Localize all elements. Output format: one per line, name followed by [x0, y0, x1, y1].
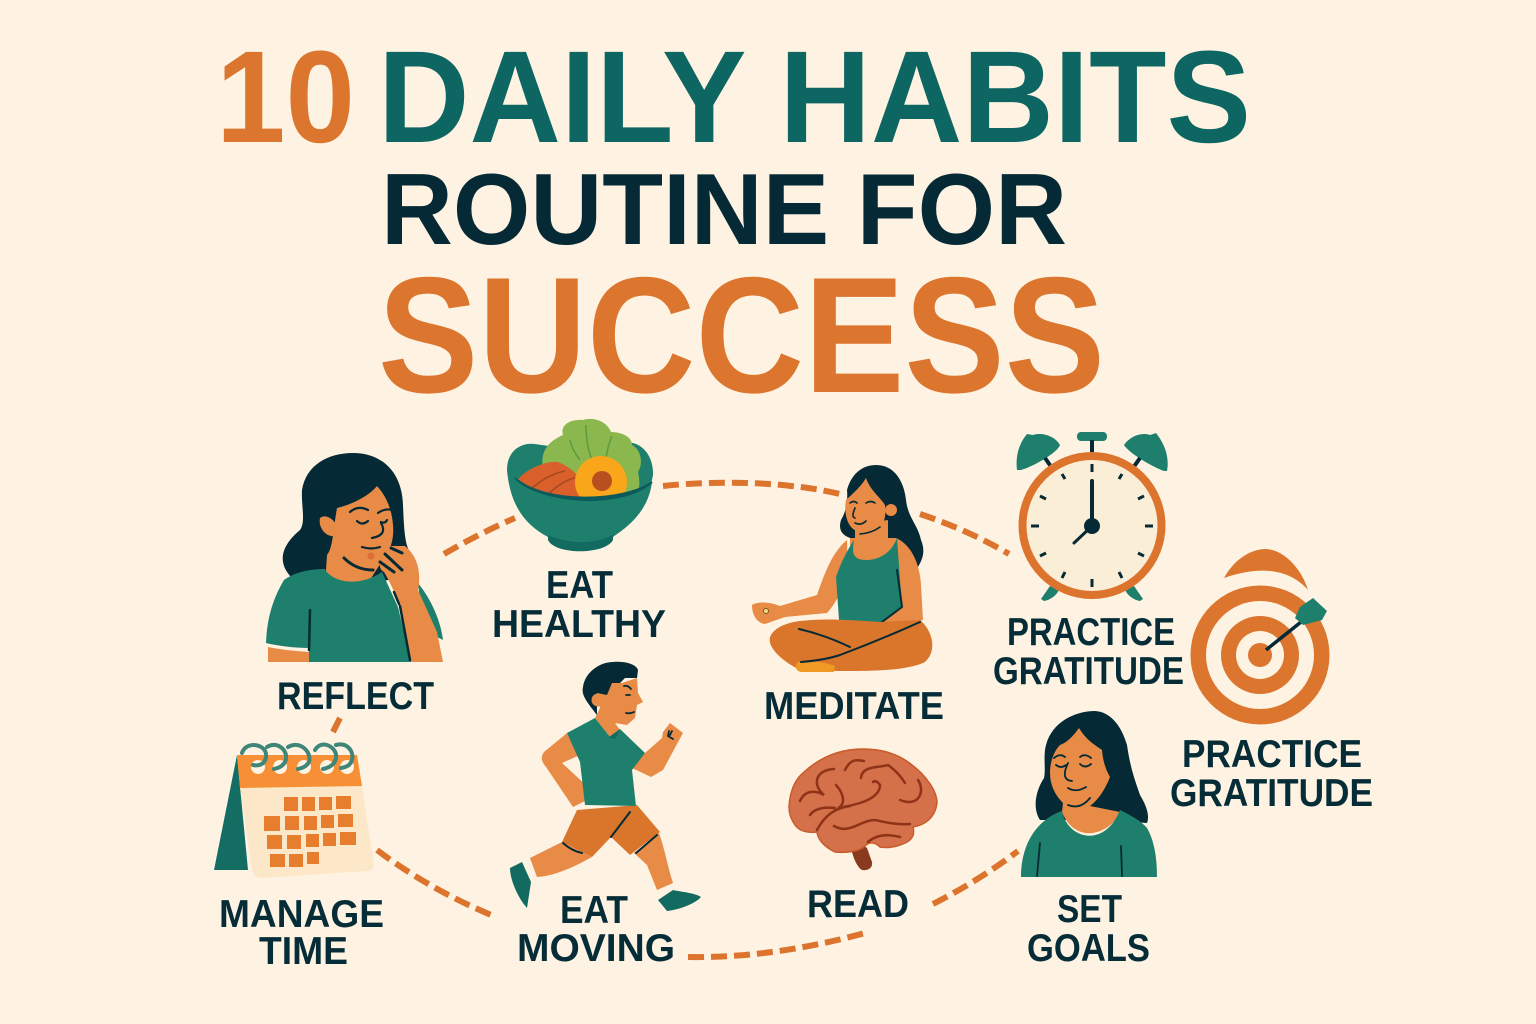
brain stem [852, 843, 872, 870]
label: manage time [219, 893, 384, 973]
label: eat healthy [492, 564, 666, 646]
hair [583, 662, 638, 715]
label: eat moving: MOVING [517, 927, 675, 970]
label: eat healthy: EAT [546, 564, 613, 607]
calendar page [240, 786, 374, 878]
icon: smiling woman [1021, 711, 1157, 877]
face [845, 478, 885, 532]
arms and hand [268, 647, 309, 662]
dart shaft [1266, 622, 1301, 650]
date squares [264, 796, 356, 867]
arms [752, 540, 848, 624]
face [1022, 456, 1162, 595]
icon: target with dart [1190, 549, 1330, 724]
neck and face [595, 678, 643, 737]
dashed connector path [333, 483, 1018, 957]
hand ring [764, 608, 768, 614]
hair [1036, 711, 1148, 823]
label: meditate: MEDITATE [764, 685, 944, 728]
brain outline [789, 749, 937, 852]
label: eat moving [517, 889, 675, 970]
title line: daily habits: DAILY HABITS [378, 23, 1251, 170]
icon: calendar [214, 744, 374, 878]
label: practice gratitude (target): PRACTICE [1182, 733, 1362, 776]
target rings [1190, 586, 1330, 724]
icon: brain [789, 749, 937, 870]
title line: routine for: ROUTINE FOR [381, 154, 1067, 266]
label: practice gratitude (target): GRATITUDE [1170, 772, 1373, 815]
label: eat moving: EAT [560, 889, 628, 932]
title line: success: SUCCESS [378, 243, 1105, 427]
icon: running boy [510, 662, 701, 911]
shoes [510, 862, 531, 908]
bowl back wall [507, 443, 653, 490]
label: eat healthy: HEALTHY [492, 603, 666, 646]
binding rings [242, 744, 352, 769]
bells [1017, 434, 1060, 470]
label: practice gratitude (clock): PRACTICE [1007, 611, 1175, 654]
bowl body [507, 470, 652, 549]
ear [592, 694, 604, 706]
label: practice gratitude (clock): GRATITUDE [993, 650, 1184, 693]
binding holes [251, 760, 354, 774]
label: set goals: GOALS [1027, 927, 1150, 970]
neck [855, 520, 888, 545]
dart flight [1295, 598, 1327, 625]
icon: alarm clock [1017, 432, 1168, 601]
crossed legs [770, 619, 932, 671]
label: set goals: SET [1057, 888, 1122, 931]
top swoosh [1224, 549, 1308, 590]
icon: salad bowl [507, 419, 653, 551]
face and neck [325, 486, 393, 585]
title number 10: 10 [216, 23, 355, 170]
hair [840, 465, 923, 567]
citrus slice [575, 456, 627, 508]
facial lines [350, 508, 392, 548]
front arm [632, 723, 683, 777]
label: practice gratitude (clock) [993, 611, 1184, 693]
salmon [517, 462, 600, 505]
icon: meditating woman [752, 465, 932, 672]
clock hands [1090, 481, 1094, 526]
label: manage time: TIME [259, 930, 348, 973]
brain folds [800, 760, 921, 842]
icon: reflecting woman [266, 453, 443, 662]
back arm [542, 733, 588, 807]
neck and face [1050, 728, 1120, 833]
tank top [836, 538, 902, 623]
shirt [1021, 810, 1157, 877]
title [216, 23, 1251, 427]
shirt [266, 569, 411, 662]
label: reflect: REFLECT [277, 675, 434, 718]
lettuce [542, 419, 641, 500]
label: manage time: MANAGE [219, 893, 384, 936]
shorts [562, 805, 660, 857]
teal stand [214, 755, 248, 870]
facial lines [1054, 755, 1091, 806]
back leg [530, 842, 592, 877]
orange header [237, 755, 362, 788]
feet [1041, 586, 1143, 601]
label: read: READ [807, 883, 909, 926]
front leg [634, 833, 673, 890]
hour ticks [1031, 464, 1153, 587]
top handle [1077, 432, 1107, 441]
label: practice gratitude (target) [1170, 733, 1373, 815]
label: set goals [1027, 888, 1150, 970]
hair [283, 453, 412, 590]
shirt [567, 718, 645, 806]
